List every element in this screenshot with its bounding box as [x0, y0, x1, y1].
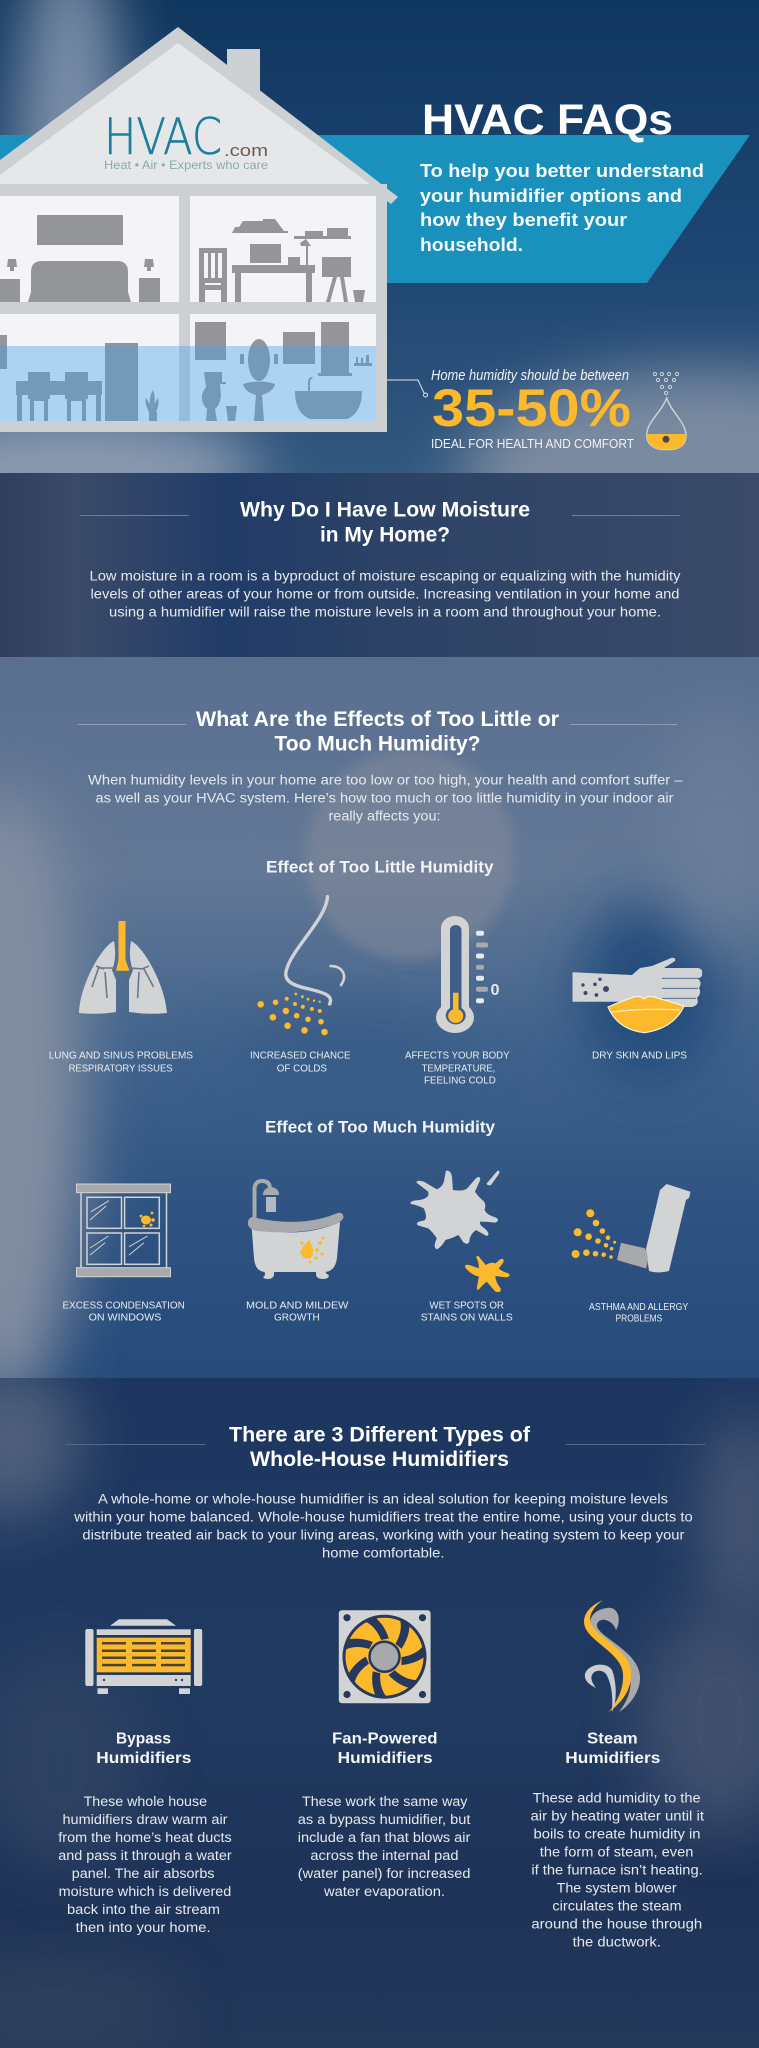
heading: low moisture: Why Do I Have Low Moisture [240, 499, 530, 522]
subheading: fan-powered: Humidifiers [338, 1750, 433, 1767]
text block: bypass: panel. The air absorbs [72, 1866, 215, 1881]
heading: effects [196, 708, 559, 756]
icon: dry skin and lips [572, 958, 702, 1033]
text block: effects intro: When humidity levels in your home are too low or too high, your health and comfort suffer – [88, 773, 683, 788]
house cutaway illustration [0, 27, 398, 432]
text block: bypass: These whole house [84, 1794, 207, 1809]
label: asthma: ASTHMA AND ALLERGY [589, 1302, 689, 1313]
text block: steam: the ductwork. [573, 1934, 661, 1949]
panel: teal banner [0, 135, 750, 283]
text block: low moisture [90, 569, 681, 620]
subheading: bypass [96, 1730, 191, 1767]
chimney [227, 49, 260, 99]
text block: fan-powered: across the internal pad [310, 1848, 459, 1863]
text block: types intro: A whole-home or whole-house humidifier is an ideal solution for keeping moisture levels [98, 1491, 668, 1506]
label: lung and sinus: LUNG AND SINUS PROBLEMS [49, 1050, 193, 1062]
icon: lungs [79, 921, 167, 1014]
text block: low moisture: levels of other areas of your home or from outside. Increasing ventilation in your home and [90, 587, 680, 602]
text block: fan-powered: include a fan that blows air [298, 1830, 471, 1845]
bedroom furniture [0, 215, 160, 302]
icon: thermometer: 0 [490, 982, 500, 999]
text block: steam: boils to create humidity in [534, 1826, 700, 1841]
label: condensation: EXCESS CONDENSATION [62, 1299, 185, 1311]
text block: steam [530, 1790, 704, 1949]
heading: low moisture [240, 499, 530, 546]
house roof [0, 27, 398, 204]
text block: bypass: and pass it through a water [58, 1848, 232, 1863]
office furniture [199, 219, 365, 302]
subheading: too little humidity: Effect of Too Little Humidity [266, 859, 494, 877]
icon: inhaler [572, 1184, 690, 1272]
label: wet spots: WET SPOTS OR [429, 1299, 504, 1311]
icon: humidifier [647, 372, 686, 450]
logo: HVAC.com: .com [224, 141, 268, 160]
subheading: steam: Humidifiers [565, 1750, 660, 1767]
subheading: steam: Steam [587, 1730, 638, 1747]
text block: types intro: distribute treated air back to your living areas, working with your heating system to keep your [82, 1527, 685, 1542]
heading: effects: Too Much Humidity? [274, 733, 480, 756]
text block: bypass: moisture which is delivered [59, 1884, 231, 1899]
text block: banner intro [420, 161, 704, 255]
label: dry skin: DRY SKIN AND LIPS [592, 1050, 687, 1062]
text block: steam: circulates the steam [552, 1898, 682, 1913]
subheading: steam [565, 1730, 660, 1767]
text block: bypass: humidifiers draw warm air [62, 1812, 228, 1827]
column: fan-powered humidifier [298, 1610, 471, 1899]
text block: types intro [73, 1491, 693, 1560]
callout: ideal humidity: 35-50% [432, 379, 631, 438]
text block: steam: The system blower [557, 1880, 677, 1895]
callout: ideal humidity [431, 368, 634, 451]
text block: steam: if the furnace isn’t heating. [531, 1862, 703, 1877]
text block: fan-powered [298, 1794, 471, 1899]
subheading: bypass: Bypass [116, 1730, 171, 1747]
panel: low moisture [0, 473, 759, 657]
text block: effects intro [88, 773, 683, 824]
label: lung and sinus: RESPIRATORY ISSUES [69, 1062, 173, 1074]
label: colds: INCREASED CHANCE [250, 1050, 350, 1062]
house walls [0, 184, 387, 432]
text block: low moisture: using a humidifier will raise the moisture levels in a room and throughout your home. [109, 605, 661, 620]
text block: steam: air by heating water until it [530, 1808, 704, 1823]
subheading: fan-powered: Fan-Powered [332, 1730, 438, 1747]
text block: bypass: from the home’s heat ducts [58, 1830, 232, 1845]
icon: steam [584, 1600, 640, 1712]
text block: effects intro: really affects you: [328, 809, 440, 824]
heading: effects: What Are the Effects of Too Little or [196, 708, 559, 731]
text block: bypass: then into your home. [76, 1920, 211, 1935]
text block: fan-powered: (water panel) for increased [298, 1866, 470, 1881]
label: body temperature: TEMPERATURE, [422, 1062, 495, 1074]
dining room furniture [0, 335, 159, 421]
panel: header background [0, 0, 759, 473]
text block: steam: These add humidity to the [533, 1790, 701, 1805]
column: bypass humidifier [58, 1619, 232, 1935]
text block: banner intro: your humidifier options and [420, 186, 682, 206]
label: mold [246, 1299, 348, 1324]
icon: fan [339, 1610, 431, 1703]
icon: thermometer [436, 916, 500, 1033]
icon: bypass humidifier [85, 1619, 202, 1694]
icon: splatter [410, 1171, 510, 1292]
text block: types intro: within your home balanced. Whole-house humidifiers treat the entire home, using your ducts to [73, 1509, 693, 1524]
callout: ideal humidity: IDEAL FOR HEALTH AND COMFORT [431, 436, 634, 451]
heading: low moisture: in My Home? [320, 523, 450, 546]
icon: window [76, 1184, 170, 1277]
label: body temperature: AFFECTS YOUR BODY [405, 1050, 510, 1062]
label: body temperature [405, 1050, 510, 1087]
label: wet spots: STAINS ON WALLS [421, 1312, 513, 1324]
text block: bypass: back into the air stream [67, 1902, 220, 1917]
text block: effects intro: as well as your HVAC system. Here’s how too much or too little humidity in your indoor air [96, 791, 674, 806]
panel: effects of humidity [0, 657, 759, 1410]
column: steam humidifier [530, 1600, 704, 1949]
icon: nose with particles [257, 897, 344, 1035]
subheading: too much humidity: Effect of Too Much Humidity [265, 1119, 496, 1137]
label: colds: OF COLDS [277, 1062, 327, 1074]
callout connector line [387, 380, 428, 397]
bathroom furniture [195, 322, 372, 421]
title: HVAC FAQs [422, 96, 673, 144]
rooms [0, 196, 376, 421]
text block: banner intro: household. [420, 235, 523, 255]
text block: fan-powered: These work the same way [302, 1794, 468, 1809]
label: wet spots [421, 1299, 513, 1324]
water level overlay [0, 346, 376, 421]
logo: HVAC.com: Heat • Air • Experts who care [104, 158, 268, 172]
subheading: bypass: Humidifiers [96, 1750, 191, 1767]
label: mold: MOLD AND MILDEW [246, 1299, 348, 1311]
text block: banner intro: To help you better understand [420, 161, 704, 181]
label: asthma: PROBLEMS [616, 1313, 663, 1324]
label: mold: GROWTH [274, 1312, 320, 1324]
text block: banner intro: how they benefit your [420, 210, 627, 230]
callout: ideal humidity: Home humidity should be between [431, 368, 629, 384]
text block: bypass [58, 1794, 232, 1935]
label: lung and sinus [49, 1050, 193, 1074]
label: condensation [62, 1299, 185, 1324]
logo: HVAC.com: HVAC [104, 108, 222, 166]
label: asthma [589, 1302, 689, 1324]
text block: low moisture: Low moisture in a room is a byproduct of moisture escaping or equalizing with the humidity [90, 569, 681, 584]
text block: steam: around the house through [531, 1916, 702, 1931]
label: condensation: ON WINDOWS [89, 1312, 161, 1324]
label: body temperature: FEELING COLD [424, 1075, 496, 1087]
text block: fan-powered: as a bypass humidifier, but [298, 1812, 471, 1827]
heading: types: There are 3 Different Types of [229, 1423, 531, 1446]
text block: steam: the form of steam, even [540, 1844, 693, 1859]
label: colds [250, 1050, 350, 1074]
text block: types intro: home comfortable. [322, 1545, 444, 1560]
heading: types [229, 1423, 531, 1471]
panel: types of humidifiers [0, 1360, 759, 2048]
icon: bathtub with mold [248, 1181, 343, 1279]
subheading: fan-powered [332, 1730, 438, 1767]
text block: fan-powered: water evaporation. [323, 1884, 445, 1899]
heading: types: Whole-House Humidifiers [250, 1448, 509, 1471]
